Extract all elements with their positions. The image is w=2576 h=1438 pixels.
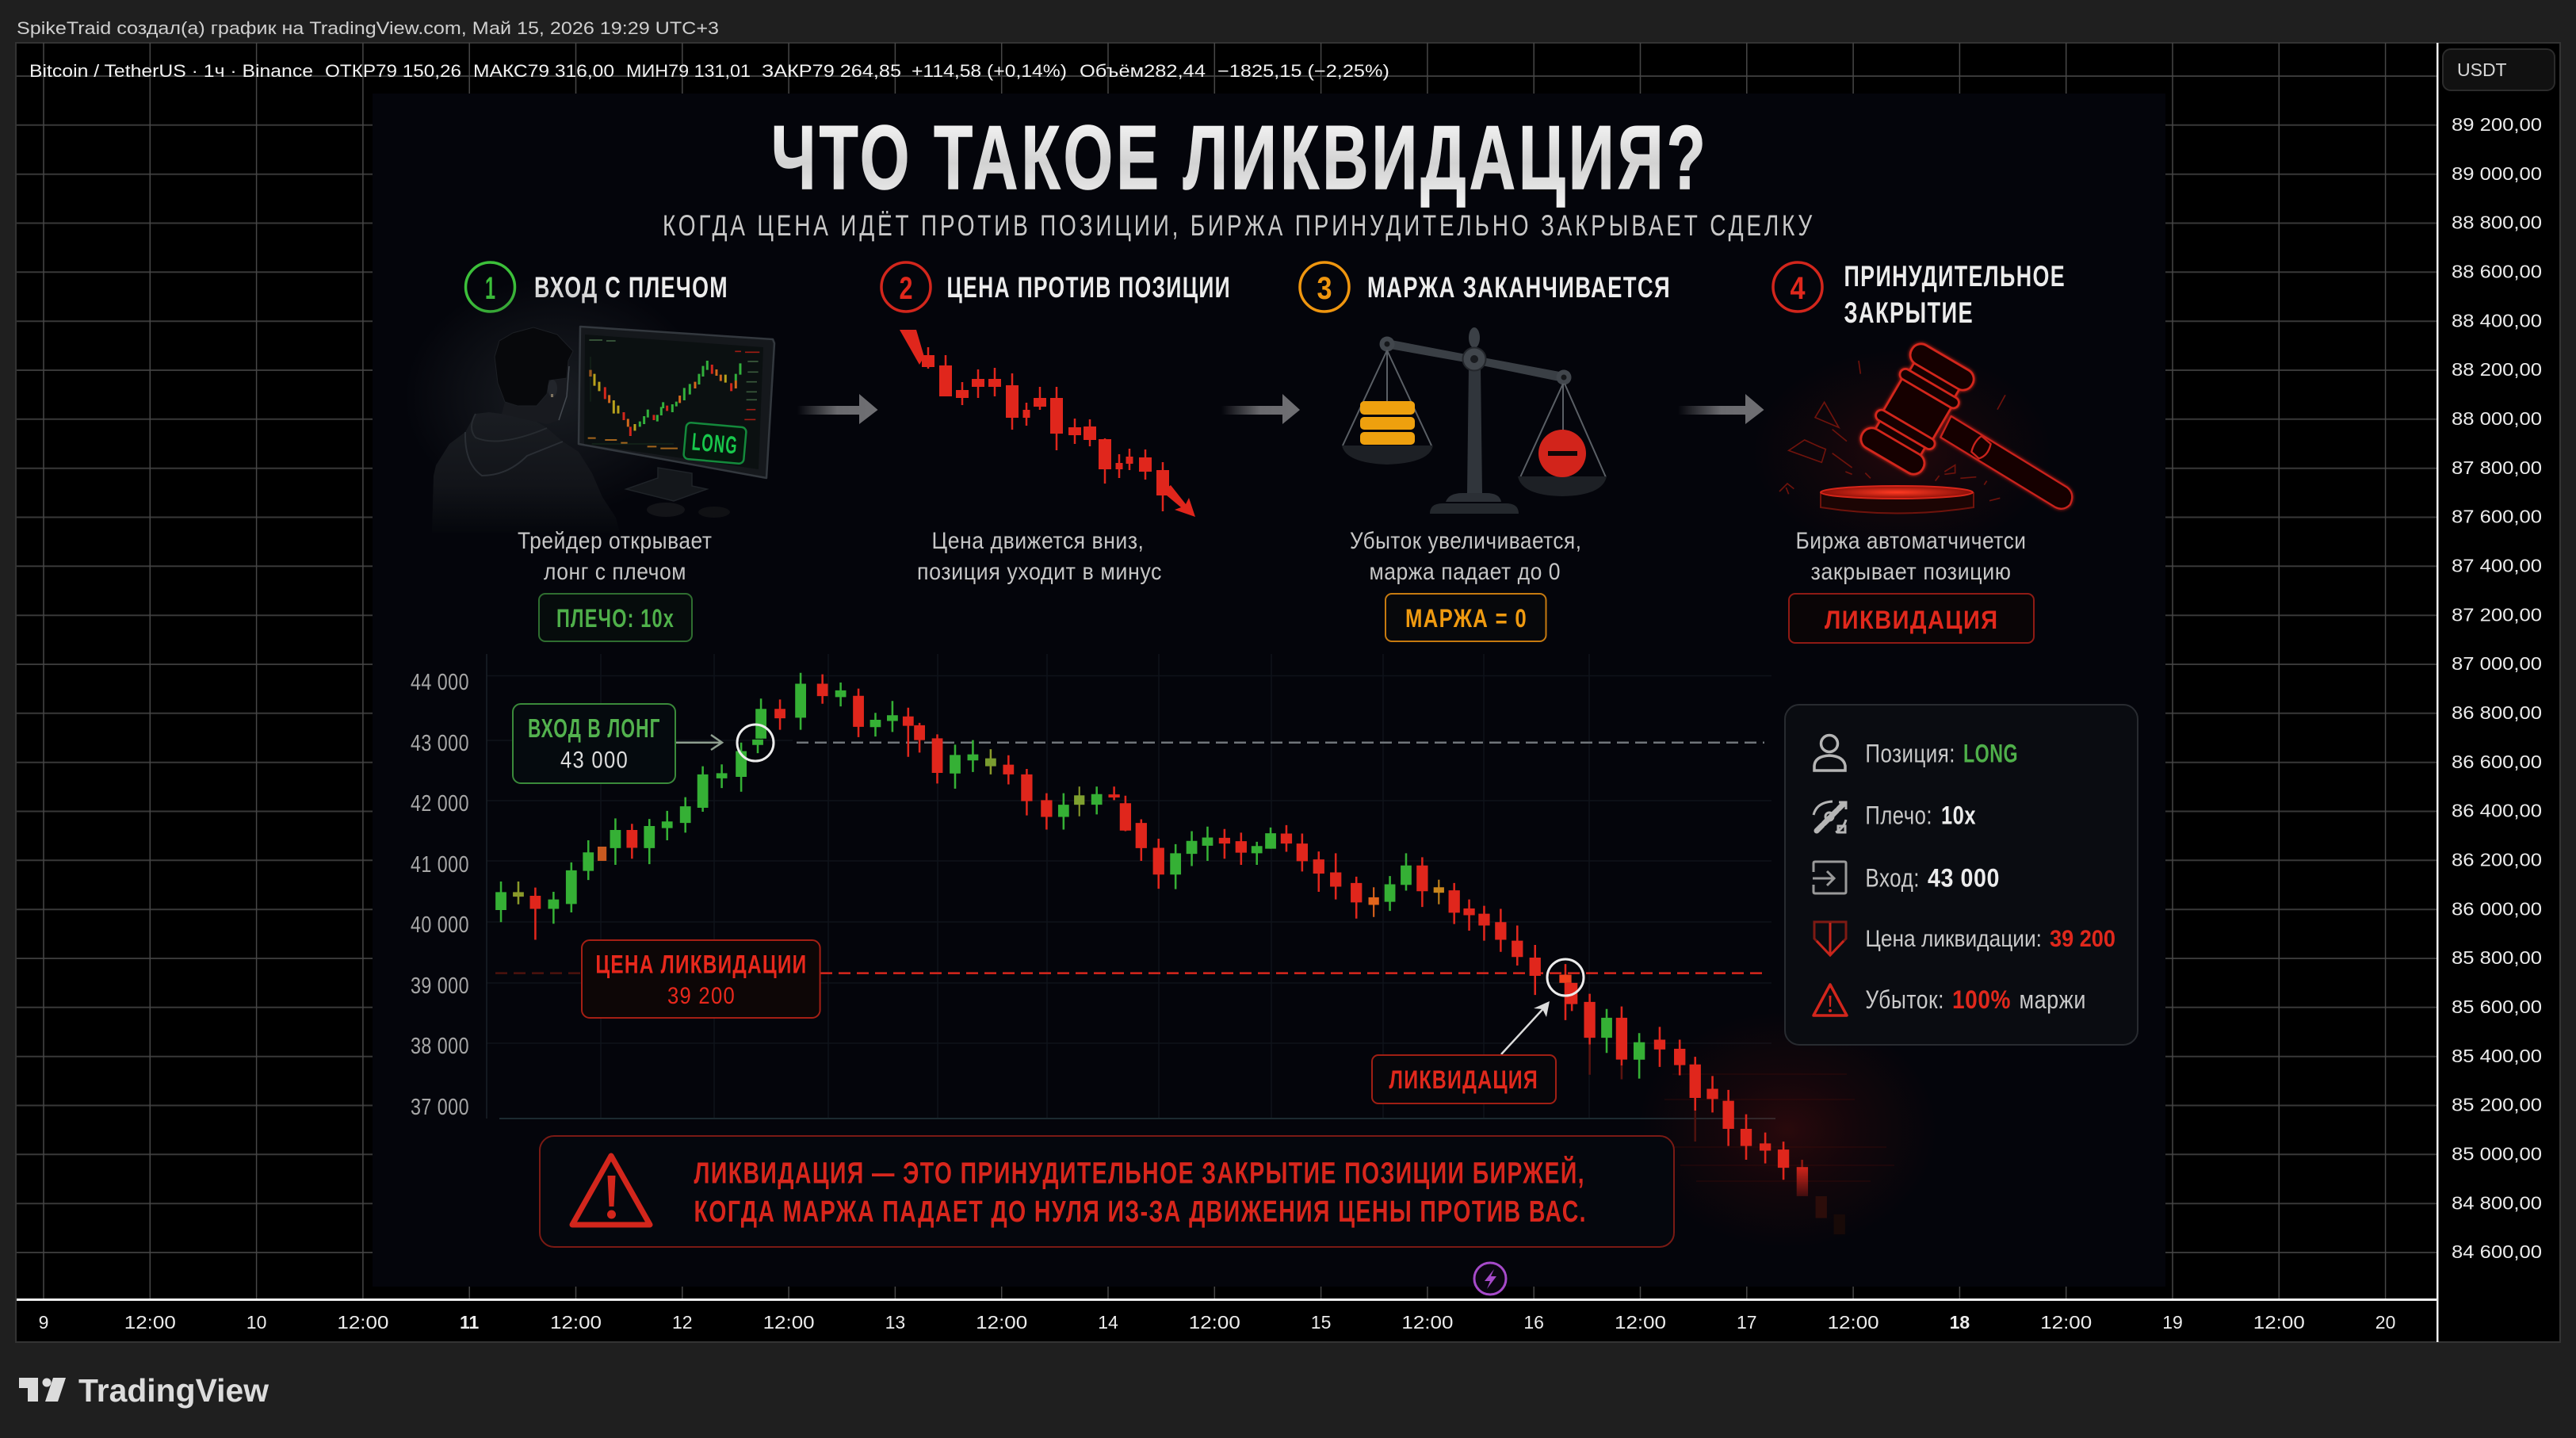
illustration: trader at monitor: LONG: [691, 428, 739, 459]
entry callout: 43 000: [560, 747, 629, 774]
position info panel: [1785, 705, 2138, 1045]
price axis labels: 87 400,00: [2452, 555, 2542, 576]
time axis labels: 14: [1098, 1312, 1118, 1333]
step 3 number: 3: [1317, 271, 1332, 306]
tradingview logo: TradingView: [78, 1372, 269, 1409]
currency badge: USDT: [2457, 59, 2507, 80]
arrow: step 2 to 3: [1221, 394, 1300, 424]
legend: symbol and OHLC values: ОТКР79 150,26: [325, 61, 461, 81]
title: ЧТО ТАКОЕ ЛИКВИДАЦИЯ?: [771, 108, 1709, 208]
entry price dashed line: [797, 741, 1764, 744]
row: position: Позиция:: [1865, 740, 1955, 768]
step 4 description: [1796, 528, 2026, 585]
step 2 description: позиция уходит в минус: [917, 559, 1162, 585]
price axis labels: 85 800,00: [2452, 947, 2542, 968]
definition text: [694, 1155, 1587, 1229]
time axis labels: 12:00: [1189, 1312, 1240, 1333]
time axis labels: 12: [672, 1312, 693, 1333]
arrow: step 1 to 2: [797, 394, 878, 424]
legend: symbol and OHLC values: МИН79 131,01: [626, 61, 751, 81]
price axis labels: 87 800,00: [2452, 457, 2542, 478]
badge: leverage 10x: [539, 594, 692, 641]
time axis labels: 10: [247, 1312, 266, 1333]
step 4 heading: ПРИНУДИТЕЛЬНОЕ: [1844, 260, 2066, 293]
liquidation price dashed line: [495, 972, 1768, 974]
time axis labels: 12:00: [1828, 1312, 1879, 1333]
liquidation price callout: ЦЕНА ЛИКВИДАЦИИ: [595, 950, 807, 979]
price axis labels: 86 800,00: [2452, 702, 2542, 723]
badge: liquidation: ЛИКВИДАЦИЯ: [1825, 606, 1999, 634]
chart price axis labels: 37 000: [411, 1095, 469, 1120]
chart price axis labels: 40 000: [411, 912, 469, 938]
time axis labels: 16: [1523, 1312, 1544, 1333]
entry callout: ВХОД В ЛОНГ: [528, 713, 661, 743]
definition callout: [540, 1136, 1674, 1247]
icon: warning triangle: [572, 1156, 650, 1225]
step 1 description: [518, 528, 712, 585]
row: loss: 100%: [1952, 985, 2011, 1014]
step 1 heading: ВХОД С ПЛЕЧОМ: [534, 271, 728, 304]
step 4 number: [1773, 262, 1822, 312]
legend: symbol and OHLC values: −1825,15 (−2,25%): [1217, 61, 1389, 81]
price axis labels: 88 000,00: [2452, 408, 2542, 429]
definition text: КОГДА МАРЖА ПАДАЕТ ДО НУЛЯ ИЗ-ЗА ДВИЖЕНИЯ ЦЕНЫ ПРОТИВ ВАС.: [694, 1195, 1587, 1229]
price axis labels: 86 400,00: [2452, 801, 2542, 821]
step 4 number: 4: [1790, 271, 1806, 306]
time axis labels: 11: [460, 1312, 480, 1333]
badge: liquidation: [1789, 594, 2034, 643]
subtitle: КОГДА ЦЕНА ИДЁТ ПРОТИВ ПОЗИЦИИ, БИРЖА ПРИНУДИТЕЛЬНО ЗАКРЫВАЕТ СДЕЛКУ: [663, 209, 1815, 242]
chart price axis labels: 44 000: [411, 670, 469, 695]
badge: leverage 10x: ПЛЕЧО: 10x: [556, 604, 675, 633]
time axis labels: 12:00: [763, 1312, 815, 1333]
badge: margin zero: [1385, 594, 1546, 641]
step 4 heading: [1844, 260, 2066, 329]
icon: user: [1814, 736, 1845, 771]
row: liquidation price: Цена ликвидации:: [1865, 926, 2042, 952]
price axis labels: 84 600,00: [2452, 1241, 2542, 1262]
step 3 description: маржа падает до 0: [1370, 559, 1561, 585]
liquidation price callout: 39 200: [667, 983, 736, 1009]
currency badge: [2443, 49, 2555, 90]
legend: symbol and OHLC values: Bitcoin / TetherUS · 1ч · Binance: [29, 61, 313, 81]
liquidation label: ЛИКВИДАЦИЯ: [1389, 1065, 1538, 1094]
price axis labels: 86 200,00: [2452, 850, 2542, 870]
step 3 description: [1350, 528, 1582, 585]
time axis labels: 12:00: [337, 1312, 388, 1333]
chart price axis labels: 42 000: [411, 791, 469, 817]
step 2 description: Цена движется вниз,: [932, 528, 1145, 554]
step 3 heading: МАРЖА ЗАКАНЧИВАЕТСЯ: [1367, 271, 1671, 304]
definition text: ЛИКВИДАЦИЯ — ЭТО ПРИНУДИТЕЛЬНОЕ ЗАКРЫТИЕ ПОЗИЦИИ БИРЖЕЙ,: [694, 1155, 1585, 1191]
illustration: falling red candles: [900, 330, 1195, 517]
step 2 number: [881, 262, 931, 312]
price axis labels: 86 000,00: [2452, 898, 2542, 919]
step 1 number: 1: [485, 271, 495, 306]
legend: symbol and OHLC values: МАКС79 316,00: [473, 61, 614, 81]
chart price axis labels: 41 000: [411, 852, 469, 878]
step 4: forced closure: [1752, 260, 2072, 643]
row: entry: Вход:: [1865, 864, 1920, 893]
legend: symbol and OHLC values: [29, 61, 1389, 81]
price axis labels: 85 000,00: [2452, 1143, 2542, 1164]
step 4 description: Биржа автоматчичетси: [1796, 528, 2026, 554]
row: position: LONG: [1963, 740, 2018, 768]
step 4 heading: ЗАКРЫТИЕ: [1844, 296, 1974, 329]
chart price axis labels: 39 000: [411, 973, 469, 999]
time axis labels: 19: [2162, 1312, 2183, 1333]
step 2 heading: ЦЕНА ПРОТИВ ПОЗИЦИИ: [946, 271, 1231, 304]
price axis labels: 87 200,00: [2452, 604, 2542, 625]
step 1 description: лонг с плечом: [544, 559, 686, 585]
arrow: entry callout to candle: [676, 735, 722, 750]
price chart grid: [487, 654, 1771, 1119]
time axis line: [17, 1298, 2437, 1301]
time axis labels: 15: [1311, 1312, 1331, 1333]
chart price axis labels: [411, 670, 469, 1120]
entry callout: [513, 704, 675, 783]
time axis labels: 20: [2375, 1312, 2395, 1333]
row: entry: 43 000: [1928, 864, 2000, 893]
liquidation marker circle: [1547, 959, 1584, 996]
icon: leverage: [1814, 801, 1846, 832]
row: loss: Убыток:: [1865, 985, 1944, 1014]
chart price axis labels: 38 000: [411, 1034, 469, 1059]
time axis labels: 12:00: [550, 1312, 602, 1333]
time axis labels: 12:00: [124, 1312, 176, 1333]
icon: warning: [1814, 985, 1847, 1015]
step 1 description: Трейдер открывает: [518, 528, 712, 554]
time axis labels: 12:00: [2040, 1312, 2092, 1333]
liquidation label: [1372, 1055, 1556, 1103]
step 3: margin runs out: [1300, 262, 1671, 641]
time axis labels: 9: [39, 1312, 48, 1333]
candles: rally to entry: [501, 673, 1008, 939]
price axis labels: 88 600,00: [2452, 262, 2542, 282]
icon: entry: [1813, 862, 1846, 893]
time axis labels: 17: [1737, 1312, 1757, 1333]
entry marker circle: [737, 725, 774, 761]
legend: symbol and OHLC values: ЗАКР79 264,85: [762, 61, 901, 81]
step 3 number: [1300, 262, 1349, 312]
icon: liquidation shield: [1814, 922, 1846, 955]
illustration: trader at monitor: [404, 277, 774, 533]
illustration: gavel: [1752, 340, 2072, 555]
candles: slow decline: [1026, 769, 1622, 1080]
illustration: tilted scales: [1342, 327, 1607, 514]
price axis labels: 85 400,00: [2452, 1046, 2542, 1066]
time axis labels: 12:00: [1401, 1312, 1453, 1333]
row: loss: маржи: [2020, 985, 2086, 1014]
step 1: entry with leverage: [404, 262, 774, 641]
step 2: price against position: [881, 262, 1231, 585]
arrow: liquidation label to candle: [1501, 1001, 1550, 1054]
price axis labels: 88 200,00: [2452, 359, 2542, 380]
price axis line: [2436, 43, 2438, 1342]
candles: post-liquidation crash: [1639, 1027, 1840, 1234]
red glow at chart end: [1637, 1011, 1938, 1249]
price axis labels: 88 800,00: [2452, 212, 2542, 233]
legend: symbol and OHLC values: +114,58 (+0,14%): [912, 61, 1067, 81]
step 1 number: [466, 262, 515, 312]
snapshot credit line: SpikeTraid создал(а) график на TradingView.com, Май 15, 2026 19:29 UTC+3: [17, 18, 719, 38]
step 2 number: 2: [899, 271, 913, 306]
row: liquidation price: 39 200: [2050, 926, 2115, 952]
price axis labels: 84 800,00: [2452, 1192, 2542, 1213]
infographic image panel: [373, 94, 2165, 1287]
price axis labels: 86 600,00: [2452, 752, 2542, 772]
arrow: step 3 to 4: [1678, 394, 1764, 424]
liquidation price callout: [582, 940, 820, 1018]
price axis labels: 85 200,00: [2452, 1095, 2542, 1115]
chart price axis labels: 43 000: [411, 731, 469, 756]
step 3 description: Убыток увеличивается,: [1350, 528, 1582, 554]
row: leverage: 10x: [1941, 801, 1976, 830]
step 4 description: закрывает позицию: [1810, 559, 2012, 585]
price axis labels: [2452, 114, 2542, 1262]
price axis labels: 87 000,00: [2452, 653, 2542, 674]
step 2 description: [917, 528, 1162, 585]
price axis labels: 89 000,00: [2452, 163, 2542, 184]
chart baseline: [499, 1118, 1775, 1119]
time axis labels: 12:00: [2253, 1312, 2305, 1333]
icon: lightning event marker: [1474, 1263, 1506, 1295]
row: leverage: Плечо:: [1865, 801, 1932, 830]
time axis labels: 12:00: [1615, 1312, 1666, 1333]
time axis labels: 18: [1950, 1312, 1970, 1333]
time axis labels: [39, 1312, 2395, 1333]
price axis labels: 87 600,00: [2452, 507, 2542, 527]
time axis labels: 12:00: [976, 1312, 1027, 1333]
badge: margin zero: МАРЖА = 0: [1405, 604, 1527, 633]
price axis labels: 85 600,00: [2452, 996, 2542, 1017]
price axis labels: 89 200,00: [2452, 114, 2542, 135]
legend: symbol and OHLC values: Объём282,44: [1080, 61, 1206, 81]
price axis labels: 88 400,00: [2452, 310, 2542, 331]
time axis labels: 13: [885, 1312, 905, 1333]
